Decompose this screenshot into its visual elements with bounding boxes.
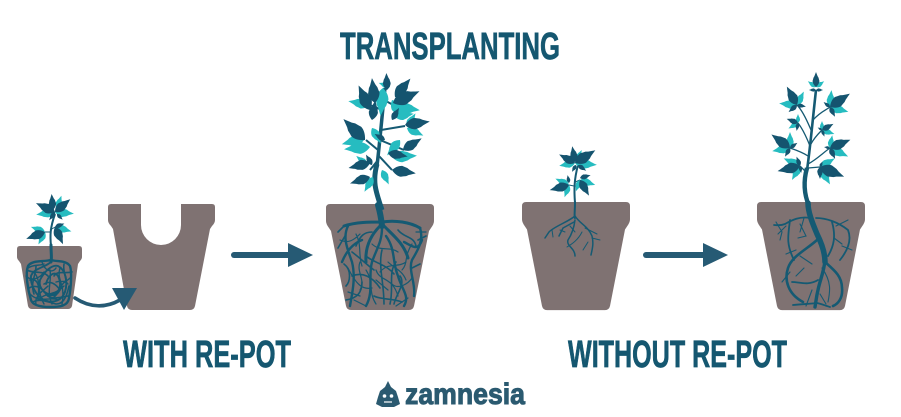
- arrow: curved into empty pot: [75, 288, 137, 310]
- arrow: with re-pot: [234, 243, 313, 267]
- plant: leggy stem and leaves: [768, 72, 853, 206]
- roots: long taproots: [774, 203, 852, 307]
- pot: empty pot with plug-shaped hole: [108, 204, 215, 310]
- arrow: without re-pot: [646, 243, 728, 267]
- roots: dense root system: [338, 205, 426, 306]
- label: without re-pot: WITHOUT RE-POT: [568, 334, 787, 376]
- plant: young leaves: [548, 146, 598, 203]
- plant: dense foliage: [339, 73, 431, 210]
- pot: young plant without re-pot: [522, 146, 630, 310]
- logo: zamnesia: [376, 378, 525, 411]
- pot: small pot with root-bound plant: [17, 194, 82, 309]
- roots: young sparse roots: [545, 202, 600, 256]
- plant: small leaves: [25, 194, 74, 246]
- label: with re-pot: WITH RE-POT: [123, 334, 291, 376]
- pot: large re-potted plant: [326, 73, 434, 310]
- pot: grown plant without re-pot: [757, 72, 865, 310]
- roots: tangled root ball: [26, 245, 72, 307]
- title: TRANSPLANTING: [340, 26, 560, 68]
- icon: mask emblem: [376, 381, 400, 407]
- logo wordmark: zamnesia: [405, 378, 525, 411]
